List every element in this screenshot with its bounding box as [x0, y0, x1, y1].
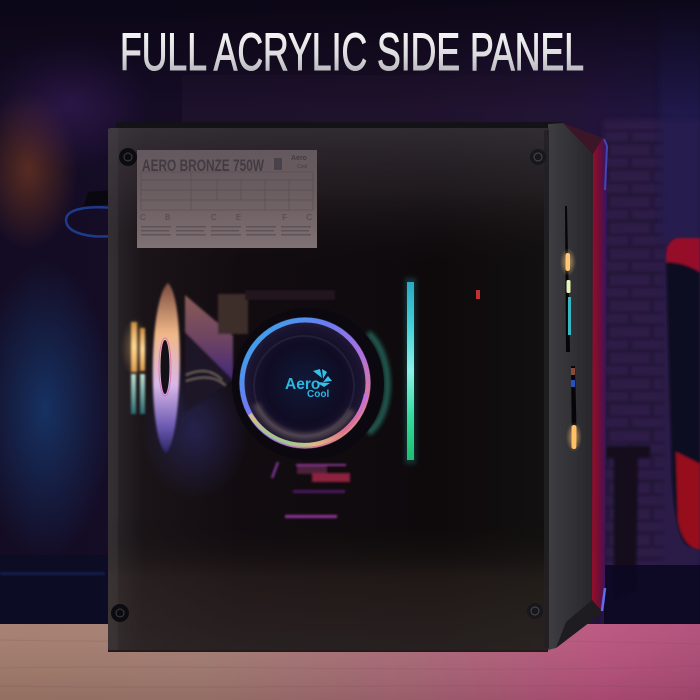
red indicator LED: [476, 290, 480, 299]
front slit upper: [565, 206, 570, 352]
rainbow ring: [242, 320, 368, 446]
cable at left of case: [66, 190, 112, 236]
case shadow foot: [108, 648, 548, 652]
right reflection edge: [544, 130, 549, 648]
amber light 4: [566, 422, 582, 452]
case top edge: [116, 122, 562, 130]
PSU label: AERO BRONZE 750W: [142, 156, 265, 175]
left glass edge highlight: [108, 128, 118, 650]
PSU label: CB CE FC: [140, 213, 312, 222]
computer case: [108, 122, 607, 650]
Aerocool logo: [285, 369, 332, 400]
rear RGB fan seen edge-on: [153, 283, 180, 453]
table top: [0, 624, 700, 700]
small blue and orange inner glints: [571, 368, 575, 375]
PSU label: Aero: [291, 155, 307, 162]
screw: top right: [530, 149, 546, 165]
panel: acrylic side panel: [108, 128, 549, 650]
glass sheen overlay: [108, 128, 549, 650]
cyan light 3: [568, 297, 571, 335]
top chamfer: [563, 123, 603, 154]
panel: front bezel: [548, 123, 607, 650]
stool behind case: [606, 446, 650, 600]
blue front edge highlights: [604, 139, 607, 190]
Aerocool logo: Aero: [285, 376, 320, 393]
front red mesh strip: [592, 138, 607, 612]
dark floor shadow at right: [604, 565, 700, 625]
CPU cooler behind fan, green rim: [368, 333, 388, 433]
bottom chamfer: [556, 600, 603, 648]
screw: bottom left: [111, 604, 129, 622]
screw: top left: [119, 148, 137, 166]
screw: bottom right: [527, 603, 543, 619]
CPU cooler fan: [232, 308, 384, 460]
red and black chair at right: [666, 238, 700, 550]
PSU label: [137, 150, 317, 248]
PSU label: Cool: [297, 164, 307, 170]
purple glow behind fan: [140, 360, 250, 500]
RAM light bars: [121, 318, 149, 414]
Aerocool logo: Cool: [307, 389, 329, 400]
amber light 1: [560, 248, 576, 276]
GPU / shroud blocks: [185, 290, 335, 412]
vertical RGB strip: [405, 278, 416, 464]
front slit lower: [571, 366, 577, 448]
inner reflections: [256, 404, 352, 436]
pale light 2: [566, 280, 570, 293]
motherboard heatsink glints: [272, 462, 350, 518]
